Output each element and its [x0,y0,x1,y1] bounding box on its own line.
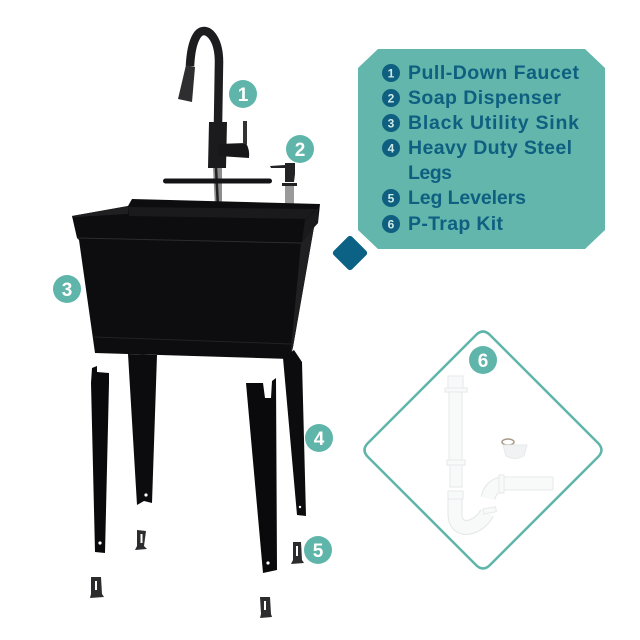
leg: back left [128,354,157,505]
list item 4: Legs [408,162,452,184]
badge 3: 3 [62,280,72,301]
list item 6: 6 [388,218,395,232]
list item 2: 2 [388,92,395,106]
badge 4 [305,424,333,452]
badge 6: 6 [478,351,488,372]
panel: parts list [358,49,605,249]
badge 5: 5 [313,541,324,562]
panel: p-trap kit diamond [364,332,602,568]
leg: front left [91,366,109,553]
badge 5 [304,536,332,564]
list item 4 [382,137,572,184]
list item 3: Black Utility Sink [408,112,579,134]
list item 5: Leg Levelers [408,187,526,209]
list item 2: Soap Dispenser [408,87,561,109]
list item 6: P-Trap Kit [408,213,504,235]
leg: back right [283,350,306,516]
sink tub [72,199,320,359]
list item 3: 3 [388,116,395,130]
badge 3 [53,275,81,303]
badge 1 [229,80,257,108]
blue diamond accent [332,235,368,271]
badge 4: 4 [314,429,325,450]
badge 1: 1 [238,85,249,106]
icon: faucet [163,31,272,207]
icon: soap dispenser [270,163,297,208]
badge 6 [469,346,497,374]
leg: front right [246,378,277,573]
list item 4: 4 [388,142,395,156]
badge 2 [286,135,314,163]
icon: p-trap pipes [445,376,553,527]
list item 1: Pull-Down Faucet [408,62,580,84]
list item 5: 5 [388,192,395,206]
list item 1: 1 [388,66,395,80]
badge 2: 2 [295,140,305,161]
leg levelers [90,530,304,618]
list item 4: Heavy Duty Steel [408,137,572,159]
leg holes [98,493,301,565]
